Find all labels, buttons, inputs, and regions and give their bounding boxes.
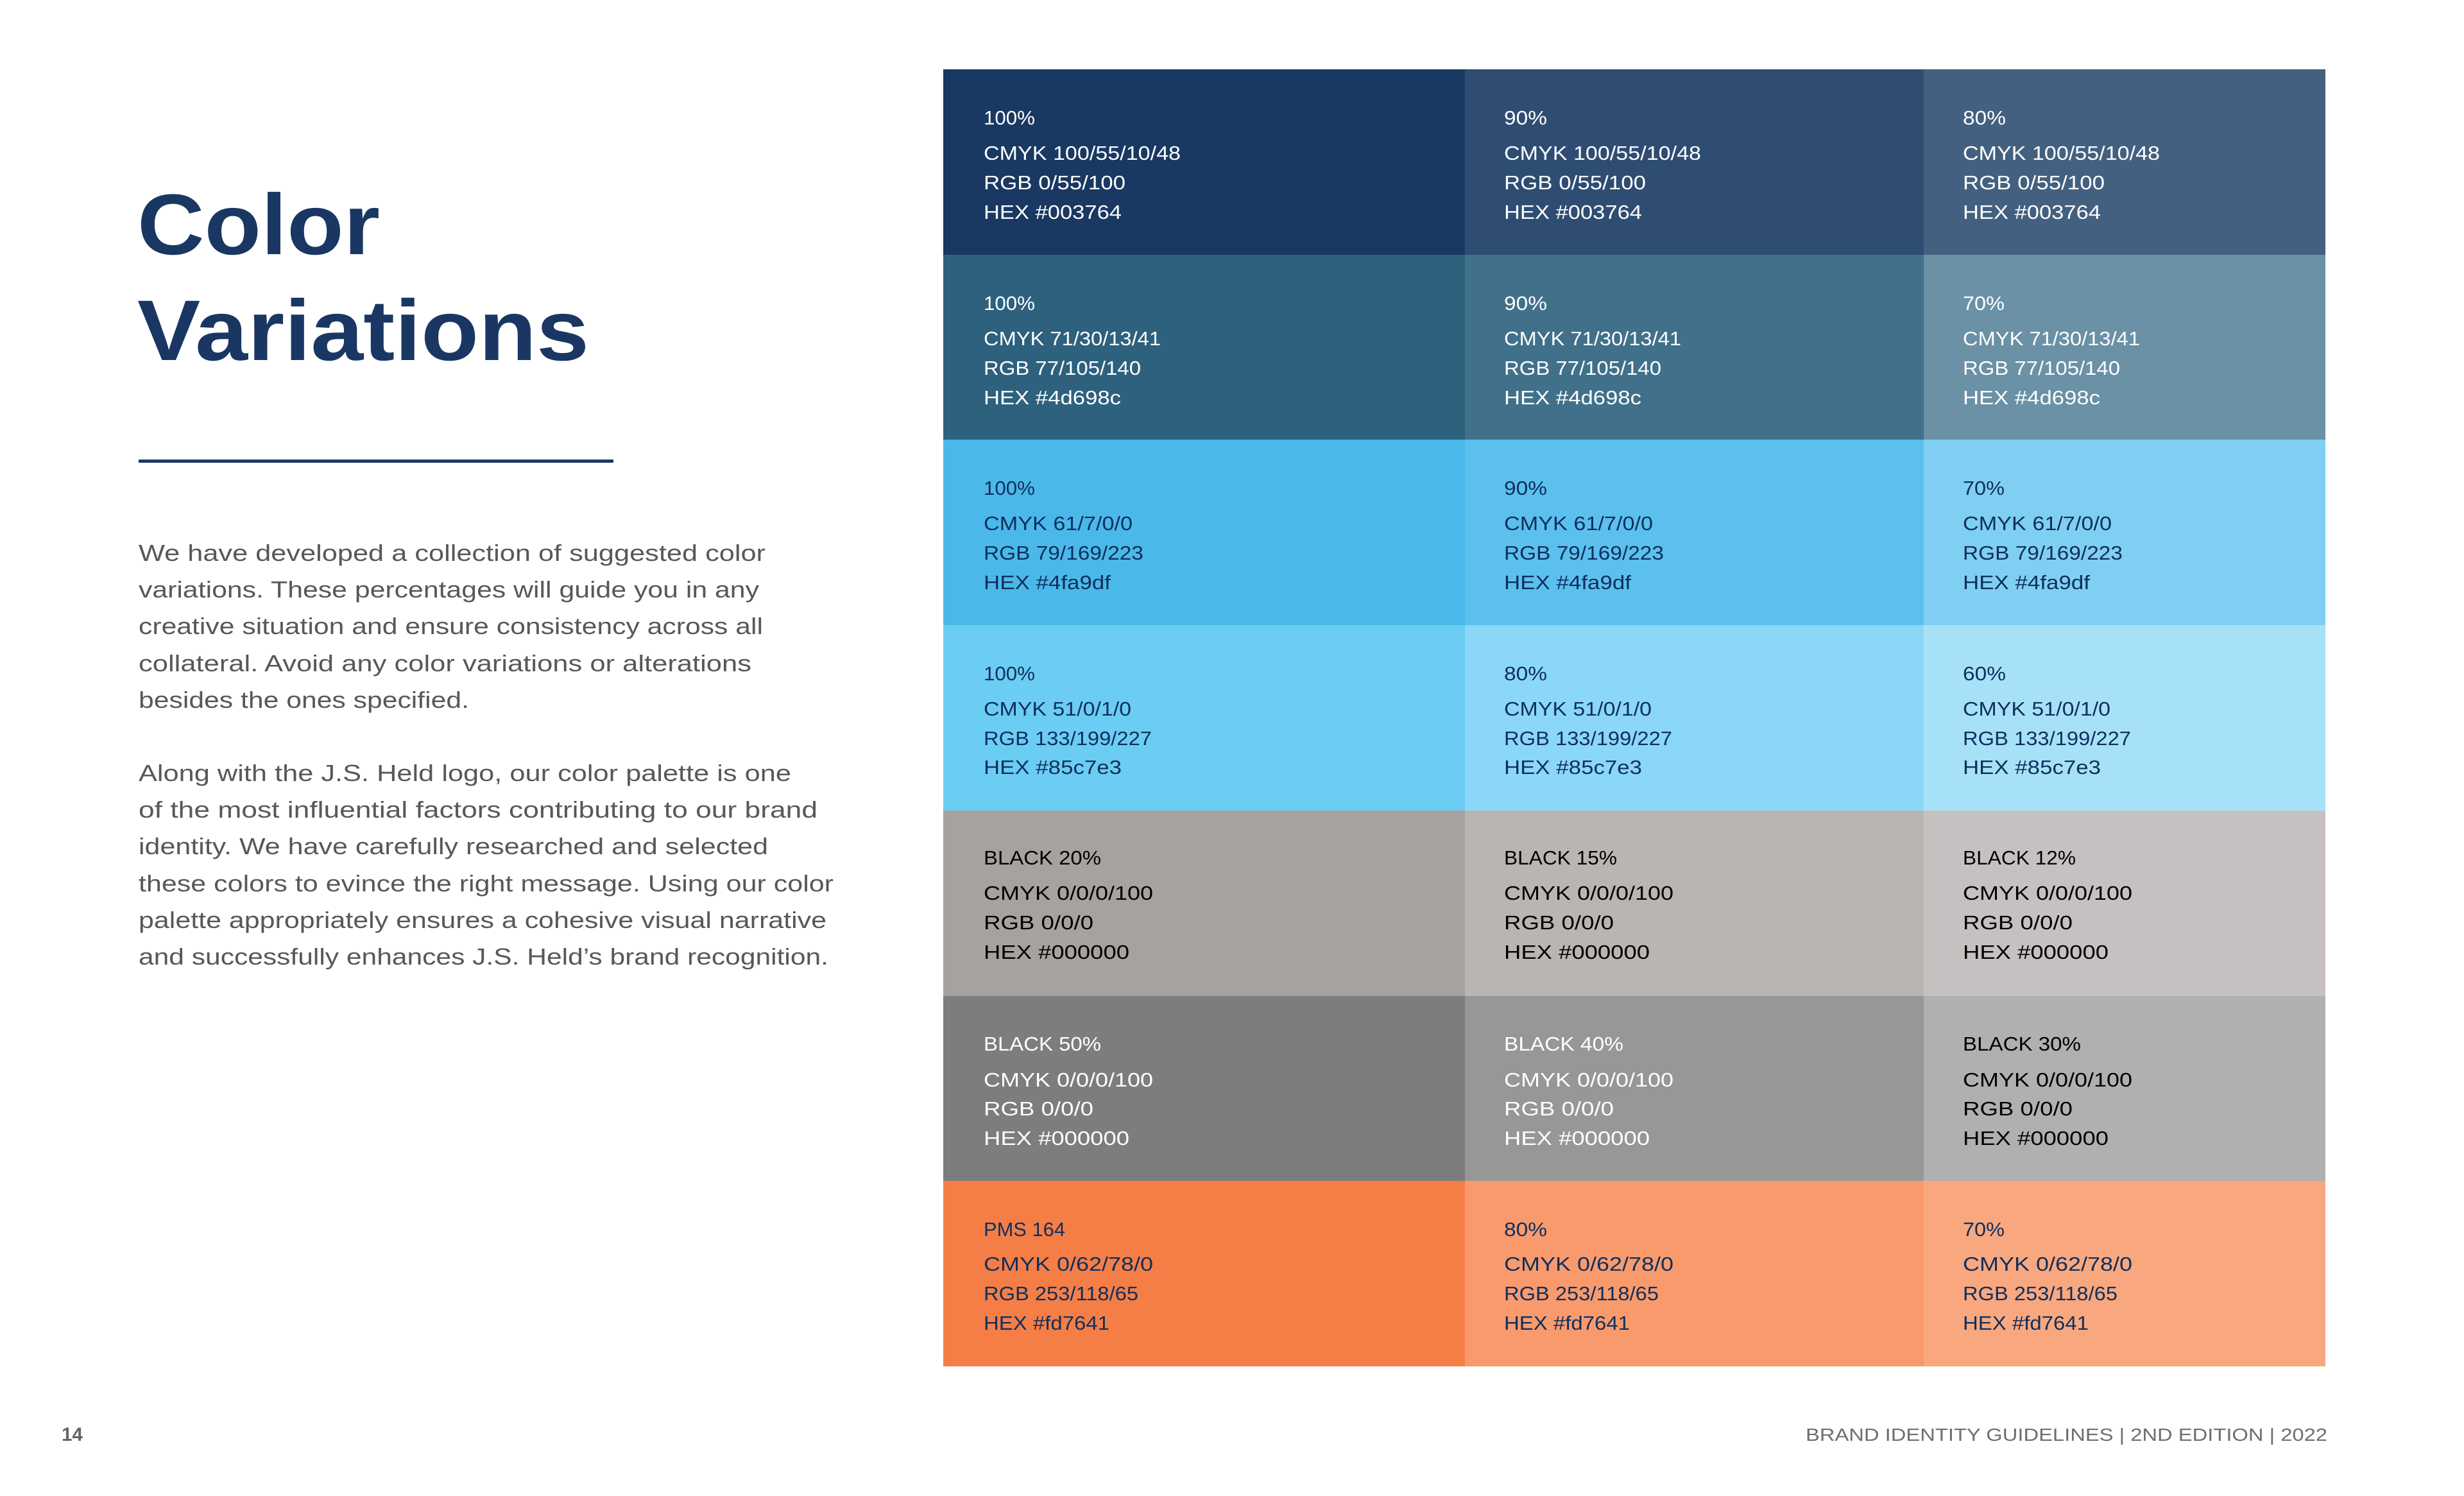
swatch: orange PMS 164: HEX #fd7641 — [984, 1312, 1109, 1334]
swatch: bright blue 90%: 90% — [1504, 477, 1547, 499]
swatch: bright blue 100% — [943, 440, 1465, 625]
swatch: sky blue 60%: CMYK 51/0/1/0 — [1963, 698, 2110, 720]
swatch: warm gray black 12% — [1924, 811, 2325, 996]
page number: 14 — [62, 1424, 83, 1445]
brand palette text block: identity. We have carefully researched and selected — [139, 833, 768, 859]
swatch: bright blue 70% — [1924, 440, 2325, 625]
swatch: bright blue 90%: RGB 79/169/223 — [1504, 542, 1664, 564]
brand palette text block — [139, 760, 834, 970]
swatch: navy 90% — [1465, 69, 1924, 255]
swatch: navy 80% — [1924, 69, 2325, 255]
swatch: warm gray black 15%: RGB 0/0/0 — [1504, 911, 1614, 934]
swatch: slate blue 100%: RGB 77/105/140 — [984, 357, 1141, 379]
swatch: orange 80%: 80% — [1504, 1218, 1547, 1241]
swatch: bright blue 90%: HEX #4fa9df — [1504, 571, 1631, 594]
swatch: sky blue 80%: 80% — [1504, 662, 1547, 685]
swatch: gray black 50%: CMYK 0/0/0/100 — [984, 1069, 1153, 1091]
swatch: slate blue 90%: CMYK 71/30/13/41 — [1504, 327, 1681, 350]
swatch: bright blue 100%: HEX #4fa9df — [984, 571, 1111, 594]
swatch: orange 70%: CMYK 0/62/78/0 — [1963, 1253, 2132, 1275]
swatch: gray black 50%: HEX #000000 — [984, 1127, 1129, 1149]
swatch: warm gray black 15%: CMYK 0/0/0/100 — [1504, 882, 1673, 904]
swatch: sky blue 100% — [943, 625, 1465, 811]
swatch: bright blue 70%: HEX #4fa9df — [1963, 571, 2090, 594]
swatch: warm gray black 15%: BLACK 15% — [1504, 847, 1617, 869]
intro text block: creative situation and ensure consistency across all — [139, 613, 763, 639]
intro text block: besides the ones specified. — [139, 687, 469, 713]
swatch: sky blue 60% — [1924, 625, 2325, 811]
swatch: warm gray black 20%: CMYK 0/0/0/100 — [984, 882, 1153, 904]
swatch: sky blue 100%: 100% — [984, 662, 1035, 685]
swatch: orange 80% — [1465, 1181, 1924, 1366]
swatch: slate blue 100% — [943, 255, 1465, 440]
swatch: orange 80%: HEX #fd7641 — [1504, 1312, 1630, 1334]
swatch: sky blue 80%: CMYK 51/0/1/0 — [1504, 698, 1652, 720]
swatch: slate blue 70%: 70% — [1963, 292, 2005, 314]
swatch: warm gray black 12%: CMYK 0/0/0/100 — [1963, 882, 2132, 904]
swatch: orange PMS 164: RGB 253/118/65 — [984, 1282, 1138, 1305]
swatch: navy 80%: 80% — [1963, 107, 2006, 129]
intro text block: collateral. Avoid any color variations or alterations — [139, 650, 751, 676]
swatch: bright blue 100%: RGB 79/169/223 — [984, 542, 1143, 564]
swatch: slate blue 100%: 100% — [984, 292, 1035, 314]
swatch: bright blue 90% — [1465, 440, 1924, 625]
swatch: warm gray black 12%: HEX #000000 — [1963, 941, 2109, 963]
swatch: slate blue 100%: CMYK 71/30/13/41 — [984, 327, 1161, 350]
intro text block — [139, 540, 766, 713]
swatch: navy 90%: HEX #003764 — [1504, 201, 1642, 223]
swatch: sky blue 60%: 60% — [1963, 662, 2006, 685]
swatch: bright blue 90%: CMYK 61/7/0/0 — [1504, 512, 1653, 535]
swatch: slate blue 90% — [1465, 255, 1924, 440]
swatch: navy 80%: CMYK 100/55/10/48 — [1963, 142, 2160, 164]
swatch: slate blue 70% — [1924, 255, 2325, 440]
swatch: navy 90%: CMYK 100/55/10/48 — [1504, 142, 1701, 164]
intro text block: variations. These percentages will guide you in any — [139, 576, 759, 603]
swatch: bright blue 70%: RGB 79/169/223 — [1963, 542, 2123, 564]
brand palette text block: and successfully enhances J.S. Held’s brand recognition. — [139, 943, 828, 970]
swatch: navy 90%: RGB 0/55/100 — [1504, 171, 1646, 194]
swatch: orange 70% — [1924, 1181, 2325, 1366]
swatch: navy 100%: RGB 0/55/100 — [984, 171, 1125, 194]
swatch: gray black 50%: BLACK 50% — [984, 1033, 1101, 1055]
swatch: gray black 30%: BLACK 30% — [1963, 1033, 2081, 1055]
intro text block: We have developed a collection of suggested color — [139, 540, 766, 566]
swatch: navy 100%: CMYK 100/55/10/48 — [984, 142, 1181, 164]
swatch: navy 80%: RGB 0/55/100 — [1963, 171, 2105, 194]
swatch: orange PMS 164: PMS 164 — [984, 1218, 1065, 1241]
swatch: navy 100%: HEX #003764 — [984, 201, 1122, 223]
title — [137, 177, 589, 379]
swatch: gray black 30%: CMYK 0/0/0/100 — [1963, 1069, 2132, 1091]
swatch: navy 100%: 100% — [984, 107, 1035, 129]
swatch: gray black 50%: RGB 0/0/0 — [984, 1097, 1093, 1120]
swatch: slate blue 70%: HEX #4d698c — [1963, 386, 2100, 409]
swatch: sky blue 80%: HEX #85c7e3 — [1504, 756, 1642, 778]
swatch: slate blue 90%: RGB 77/105/140 — [1504, 357, 1661, 379]
swatch: bright blue 70%: 70% — [1963, 477, 2005, 499]
swatch: gray black 40%: RGB 0/0/0 — [1504, 1097, 1614, 1120]
swatch: slate blue 90%: HEX #4d698c — [1504, 386, 1641, 409]
swatch: bright blue 70%: CMYK 61/7/0/0 — [1963, 512, 2112, 535]
brand palette text block: palette appropriately ensures a cohesive visual narrative — [139, 907, 826, 933]
swatch: gray black 40%: CMYK 0/0/0/100 — [1504, 1069, 1673, 1091]
swatch: orange 80%: RGB 253/118/65 — [1504, 1282, 1659, 1305]
title: Color — [137, 177, 380, 273]
swatch: warm gray black 20%: RGB 0/0/0 — [984, 911, 1093, 934]
swatch: orange 70%: 70% — [1963, 1218, 2005, 1241]
footer text: BRAND IDENTITY GUIDELINES | 2ND EDITION | 2022 — [1806, 1425, 2327, 1445]
swatch: gray black 40%: BLACK 40% — [1504, 1033, 1623, 1055]
swatch: sky blue 60%: HEX #85c7e3 — [1963, 756, 2101, 778]
swatch: warm gray black 20%: HEX #000000 — [984, 941, 1129, 963]
swatch: gray black 30% — [1924, 996, 2325, 1181]
swatch: navy 100% — [943, 69, 1465, 255]
swatch: slate blue 70%: RGB 77/105/140 — [1963, 357, 2120, 379]
swatch: bright blue 100%: CMYK 61/7/0/0 — [984, 512, 1133, 535]
swatch: warm gray black 15% — [1465, 811, 1924, 996]
swatch: gray black 50% — [943, 996, 1465, 1181]
swatch: sky blue 100%: CMYK 51/0/1/0 — [984, 698, 1131, 720]
swatch: warm gray black 12%: RGB 0/0/0 — [1963, 911, 2073, 934]
swatch: warm gray black 15%: HEX #000000 — [1504, 941, 1650, 963]
swatch: gray black 30%: RGB 0/0/0 — [1963, 1097, 2073, 1120]
swatch: orange 70%: HEX #fd7641 — [1963, 1312, 2089, 1334]
swatch: orange PMS 164: CMYK 0/62/78/0 — [984, 1253, 1153, 1275]
swatch: warm gray black 12%: BLACK 12% — [1963, 847, 2076, 869]
swatch: sky blue 100%: HEX #85c7e3 — [984, 756, 1122, 778]
swatch: orange PMS 164 — [943, 1181, 1465, 1366]
swatch: orange 80%: CMYK 0/62/78/0 — [1504, 1253, 1673, 1275]
swatch: warm gray black 20% — [943, 811, 1465, 996]
brand palette text block: of the most influential factors contributing to our brand — [139, 796, 817, 823]
swatch: bright blue 100%: 100% — [984, 477, 1035, 499]
swatch: slate blue 70%: CMYK 71/30/13/41 — [1963, 327, 2140, 350]
swatch: gray black 40%: HEX #000000 — [1504, 1127, 1650, 1149]
swatch: gray black 40% — [1465, 996, 1924, 1181]
swatch: sky blue 100%: RGB 133/199/227 — [984, 727, 1152, 750]
swatch: sky blue 80% — [1465, 625, 1924, 811]
swatch: gray black 30%: HEX #000000 — [1963, 1127, 2109, 1149]
swatch: slate blue 90%: 90% — [1504, 292, 1547, 314]
swatch: sky blue 60%: RGB 133/199/227 — [1963, 727, 2131, 750]
title: Variations — [137, 283, 589, 379]
brand palette text block: Along with the J.S. Held logo, our color palette is one — [139, 760, 791, 786]
brand palette text block: these colors to evince the right message. Using our color — [139, 870, 834, 897]
swatch: slate blue 100%: HEX #4d698c — [984, 386, 1121, 409]
swatch: warm gray black 20%: BLACK 20% — [984, 847, 1101, 869]
swatch: navy 80%: HEX #003764 — [1963, 201, 2101, 223]
swatch: orange 70%: RGB 253/118/65 — [1963, 1282, 2118, 1305]
heading rule — [139, 460, 613, 463]
swatch: navy 90%: 90% — [1504, 107, 1547, 129]
swatch: sky blue 80%: RGB 133/199/227 — [1504, 727, 1672, 750]
